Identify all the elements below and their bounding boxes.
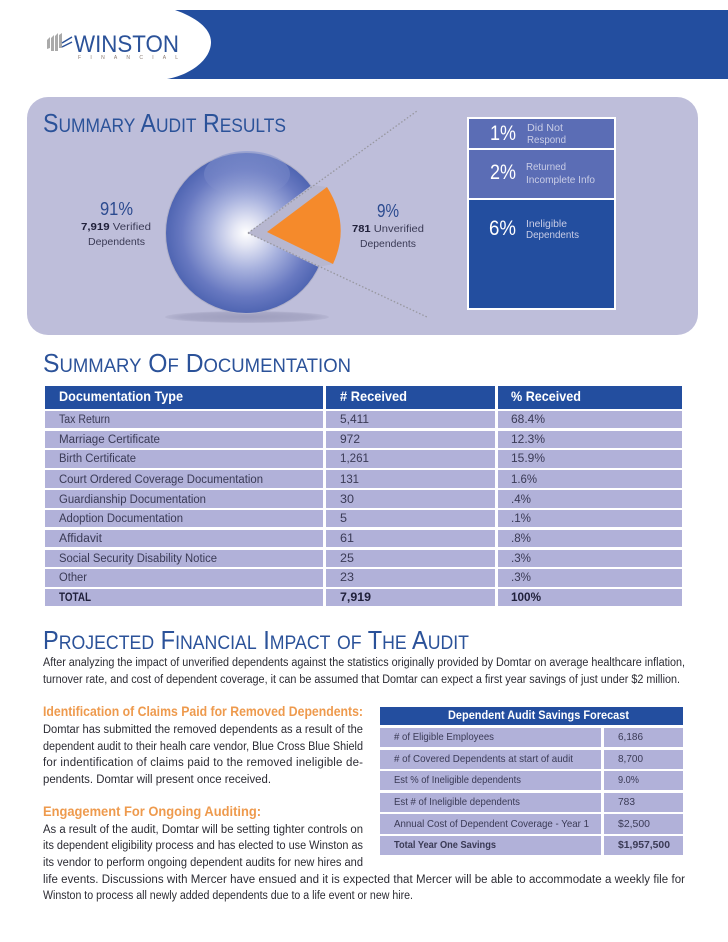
forecast text: # of Eligible Employees bbox=[394, 731, 494, 743]
body text: engagement: its vendor to perform ongoing dependent audits for new hires and bbox=[43, 857, 363, 869]
table text: .3% bbox=[511, 553, 531, 565]
table text: 5 bbox=[340, 513, 347, 525]
table text: .3% bbox=[511, 572, 531, 584]
forecast rows bbox=[380, 728, 683, 855]
forecast text: Est # of Ineligible dependents bbox=[394, 796, 520, 808]
forecast text: 8,700 bbox=[618, 753, 643, 765]
table text: Other bbox=[59, 572, 87, 584]
body text: identification of claims: Domtar has submitted the removed dependents as a result of the bbox=[43, 724, 363, 736]
table text: 30 bbox=[340, 494, 354, 506]
label: 9% unverified bbox=[352, 201, 424, 250]
table text: 15.9% bbox=[511, 453, 545, 465]
table text: Social Security Disability Notice bbox=[59, 553, 217, 565]
forecast text: $1,957,500 bbox=[618, 839, 670, 851]
subheading: identification of claims: Identification of Claims Paid for Removed Dependents: bbox=[43, 703, 363, 719]
body text: identification of claims bbox=[43, 724, 363, 786]
label: 9% unverified: 9% bbox=[377, 201, 399, 221]
table text: 68.4% bbox=[511, 414, 545, 426]
forecast header: Dependent Audit Savings Forecast bbox=[448, 710, 629, 722]
body text: identification of claims: pendents. Domtar will present once received. bbox=[43, 774, 271, 786]
logo: Winston Financial bbox=[47, 31, 179, 61]
stacked bar: breakdown of unverified bbox=[467, 117, 616, 310]
table text: Affidavit bbox=[59, 533, 103, 545]
body text: identification of claims: for indentification of claims paid to the removed ineligible de- bbox=[43, 757, 363, 769]
segment: ineligible dependents bbox=[469, 200, 614, 308]
table text: 23 bbox=[340, 572, 354, 584]
label: 9% unverified: 781 Unverified bbox=[352, 223, 424, 235]
subheading: engagement: Engagement For Ongoing Auditing: bbox=[43, 803, 261, 819]
body text: engagement bbox=[43, 824, 685, 902]
table header bbox=[45, 386, 682, 409]
forecast text: 783 bbox=[618, 796, 635, 808]
label: 91% verified: Dependents bbox=[88, 236, 145, 248]
table text: Marriage Certificate bbox=[59, 434, 160, 446]
segment: did not respond bbox=[469, 119, 614, 148]
segment: returned incomplete info: Returned bbox=[526, 162, 566, 173]
segment: ineligible dependents: Dependents bbox=[526, 230, 579, 241]
logo wordmark: WINSTON bbox=[74, 31, 179, 58]
intro paragraph: turnover rate, and cost of dependent coverage, it can be assumed that Domtar can expect a first year savings of just under $2 million. bbox=[43, 674, 680, 686]
section: identification of claims bbox=[43, 703, 363, 786]
forecast text: Annual Cost of Dependent Coverage - Year 1 bbox=[394, 818, 589, 830]
label: 91% verified: 91% bbox=[100, 199, 133, 219]
table rows bbox=[45, 411, 682, 606]
panel: summary audit results bbox=[27, 97, 698, 335]
heading: summary audit results: SUMMARY AUDIT RESULTS bbox=[43, 108, 286, 138]
body text: engagement: life events. Discussions with Mercer have ensued and it is expected that Mercer will be able to accommodate a weekly file for bbox=[43, 874, 685, 886]
table text: Guardianship Documentation bbox=[59, 494, 206, 506]
table: documentation received bbox=[45, 386, 682, 606]
table text: 61 bbox=[340, 533, 354, 545]
table text: 7,919 bbox=[340, 592, 371, 604]
table text: .1% bbox=[511, 513, 531, 525]
forecast text: 9.0% bbox=[618, 774, 639, 786]
table text bbox=[59, 414, 545, 604]
body text: identification of claims: dependent audit to their healh care vendor, Blue Cross Blue Shield bbox=[43, 741, 363, 753]
table text: 100% bbox=[511, 592, 541, 604]
table: dependent audit savings forecast bbox=[380, 707, 683, 855]
segment: ineligible dependents: 6% bbox=[489, 217, 516, 240]
segment: did not respond: 1% bbox=[490, 122, 516, 145]
forecast header bbox=[380, 707, 683, 725]
segment: did not respond: Respond bbox=[527, 135, 566, 146]
pie chart: 91% verified and 9% unverified bbox=[165, 111, 427, 323]
segment: returned incomplete info: 2% bbox=[490, 161, 516, 184]
table text: 972 bbox=[340, 434, 360, 446]
heading: projected financial impact: PROJECTED FINANCIAL IMPACT OF THE AUDIT bbox=[43, 625, 469, 655]
label: 91% verified bbox=[81, 199, 151, 248]
table text: Birth Certificate bbox=[59, 453, 136, 465]
intro paragraph bbox=[43, 657, 685, 686]
heading: summary of documentation: SUMMARY OF DOCUMENTATION bbox=[43, 348, 351, 378]
table text: 25 bbox=[340, 553, 354, 565]
segment: did not respond: Did Not bbox=[527, 123, 563, 134]
table header: Documentation Type bbox=[59, 388, 183, 404]
table text: 131 bbox=[340, 474, 359, 486]
table text: 1.6% bbox=[511, 474, 537, 486]
body text: engagement: Winston to process all newly added dependents due to a life event or new hire. bbox=[43, 890, 413, 902]
table text: Court Ordered Coverage Documentation bbox=[59, 474, 263, 486]
table text: 1,261 bbox=[340, 453, 369, 465]
intro paragraph: After analyzing the impact of unverified dependents against the statistics originally provided by Domtar on average healthcare inflation, bbox=[43, 657, 685, 669]
table text: 12.3% bbox=[511, 434, 545, 446]
body text: engagement: its dependent eligibility process and has elected to use Winston as bbox=[43, 840, 363, 852]
table header: # Received bbox=[340, 388, 407, 404]
label: 9% unverified: Dependents bbox=[360, 238, 416, 250]
forecast text: 6,186 bbox=[618, 731, 643, 743]
forecast text: # of Covered Dependents at start of audit bbox=[394, 753, 573, 765]
segment: returned incomplete info: Incomplete Info bbox=[526, 175, 595, 186]
table header: % Received bbox=[511, 388, 581, 404]
table text: Tax Return bbox=[59, 414, 110, 426]
segment: ineligible dependents: Ineligible bbox=[526, 219, 567, 230]
table text: 5,411 bbox=[340, 414, 369, 426]
forecast text: Total Year One Savings bbox=[394, 839, 496, 851]
logo tagline: F I N A N C I A L bbox=[78, 55, 178, 61]
segment: returned incomplete info bbox=[469, 150, 614, 198]
table text: .8% bbox=[511, 533, 531, 545]
label: 91% verified: 7,919 Verified bbox=[81, 221, 151, 233]
forecast text: Est % of Ineligible dependents bbox=[394, 774, 521, 786]
forecast text bbox=[394, 731, 670, 851]
table text: TOTAL bbox=[59, 592, 91, 604]
body text: engagement: As a result of the audit, Domtar will be setting tighter controls on bbox=[43, 824, 363, 836]
section: engagement for ongoing auditing bbox=[43, 803, 685, 902]
icon: logo fins bbox=[47, 33, 72, 51]
table text: Adoption Documentation bbox=[59, 513, 183, 525]
forecast text: $2,500 bbox=[618, 818, 650, 830]
header band bbox=[167, 10, 728, 79]
table text: .4% bbox=[511, 494, 531, 506]
